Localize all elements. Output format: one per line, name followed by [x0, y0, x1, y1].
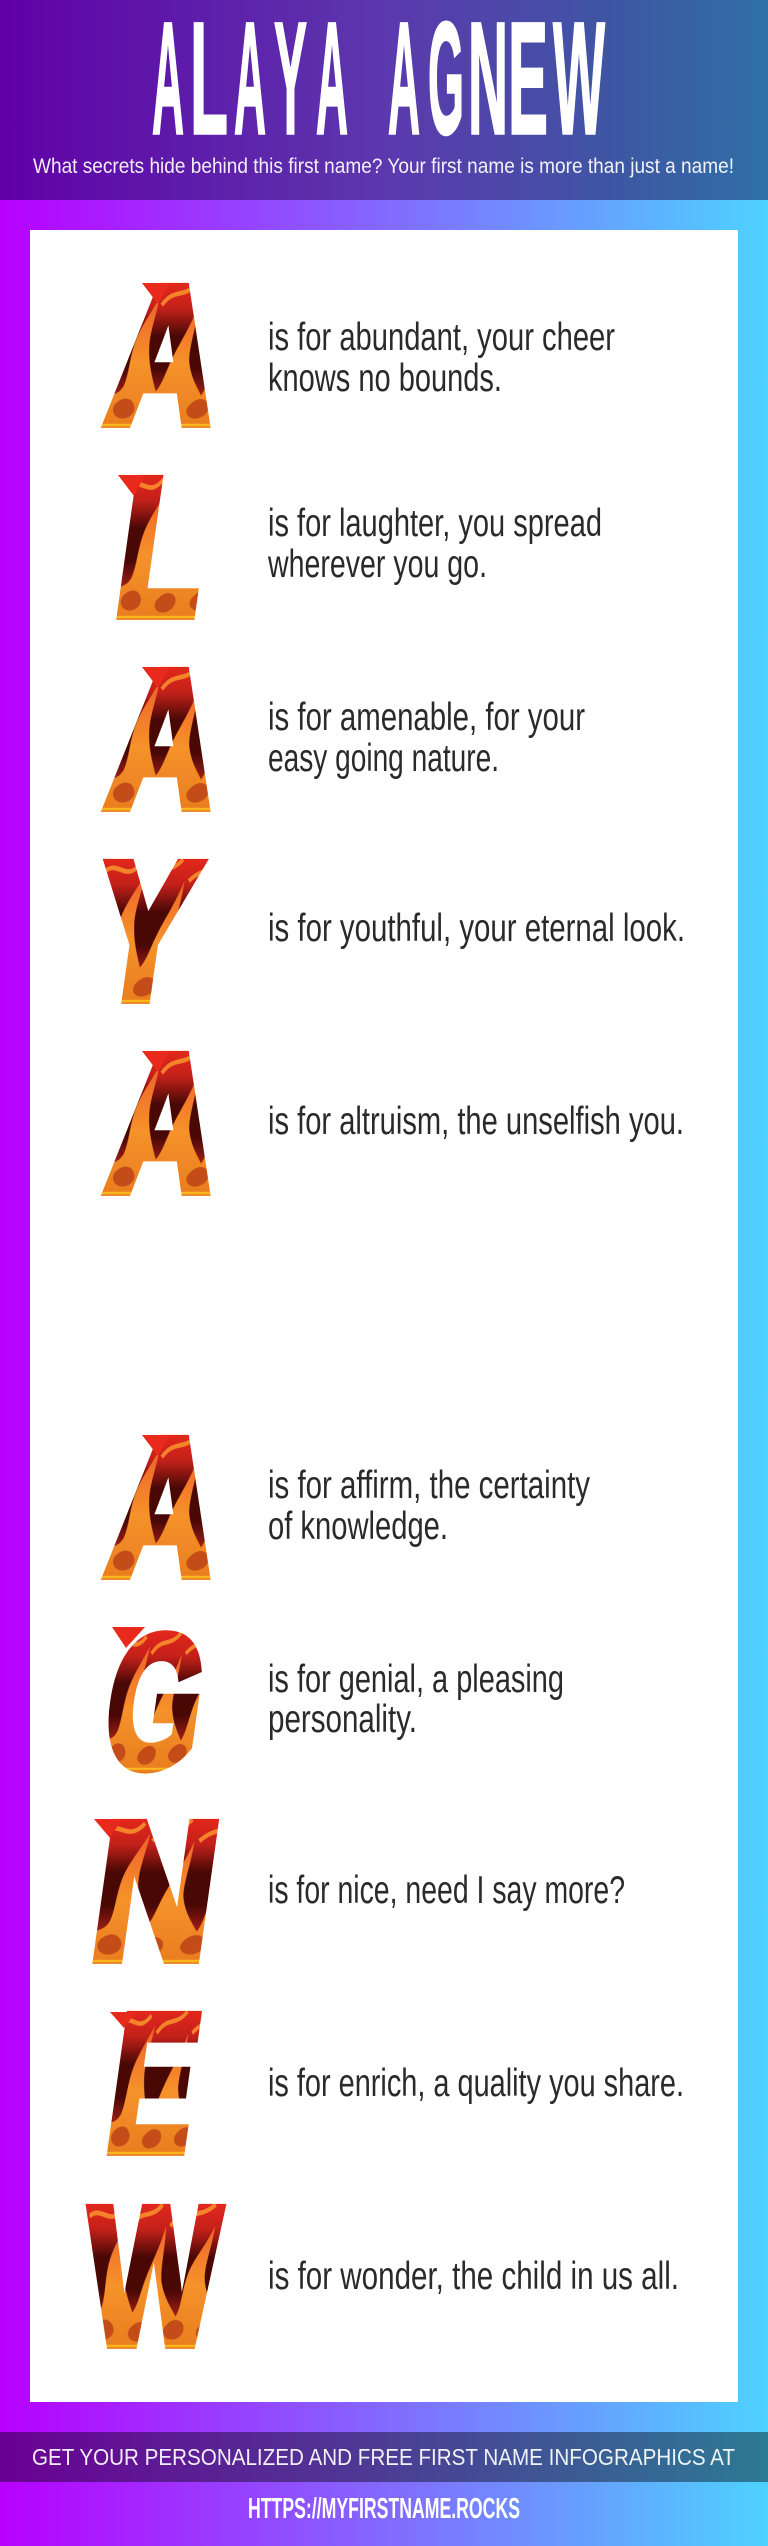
fire letter G: G	[93, 1596, 218, 1807]
row: A altruism	[98, 1014, 684, 1234]
header band	[0, 0, 768, 200]
text: nice: is for nice, need I say more?	[268, 1869, 625, 1912]
text: laughter	[267, 502, 602, 586]
footer url: HTTPS://MYFIRSTNAME.ROCKS	[248, 2493, 520, 2525]
row: L laughter	[105, 438, 602, 657]
fire letter A: A	[98, 246, 232, 466]
text: abundant	[268, 316, 615, 400]
white content panel	[30, 230, 738, 2402]
row: A affirm	[98, 1398, 590, 1618]
row: N nice	[80, 1781, 625, 2001]
text: affirm	[268, 1464, 590, 1548]
row: W wonder	[84, 2167, 679, 2387]
fire letter N: N	[80, 1781, 232, 2001]
row: Y youthful	[81, 822, 685, 1042]
title	[152, 0, 605, 168]
text: genial	[268, 1658, 564, 1741]
text: amenable: is for amenable, for your	[268, 696, 585, 739]
text: amenable: easy going nature.	[268, 737, 499, 780]
text: laughter: is for laughter, you spread	[268, 502, 602, 545]
fire letter A: A	[98, 1014, 232, 1234]
text: amenable	[268, 696, 585, 780]
fire letter L: L	[105, 438, 221, 657]
row: E enrich	[96, 1974, 684, 2193]
text: abundant: is for abundant, your cheer	[268, 316, 615, 359]
row: A abundant	[98, 246, 615, 466]
fire letter Y: Y	[81, 822, 210, 1042]
text: genial: personality.	[268, 1698, 417, 1741]
row: A amenable	[98, 630, 585, 850]
fire letter W: W	[84, 2167, 223, 2387]
text: genial: is for genial, a pleasing	[268, 1658, 564, 1701]
fire letter A: A	[98, 1398, 232, 1618]
text: laughter: wherever you go.	[267, 543, 487, 586]
footer band	[0, 2432, 768, 2482]
row: G genial	[93, 1596, 564, 1807]
text: abundant: knows no bounds.	[268, 357, 502, 400]
fire letter E: E	[96, 1974, 212, 2193]
text: affirm: is for affirm, the certainty	[268, 1464, 590, 1507]
fire letter A: A	[98, 630, 232, 850]
text: affirm: of knowledge.	[268, 1505, 448, 1548]
